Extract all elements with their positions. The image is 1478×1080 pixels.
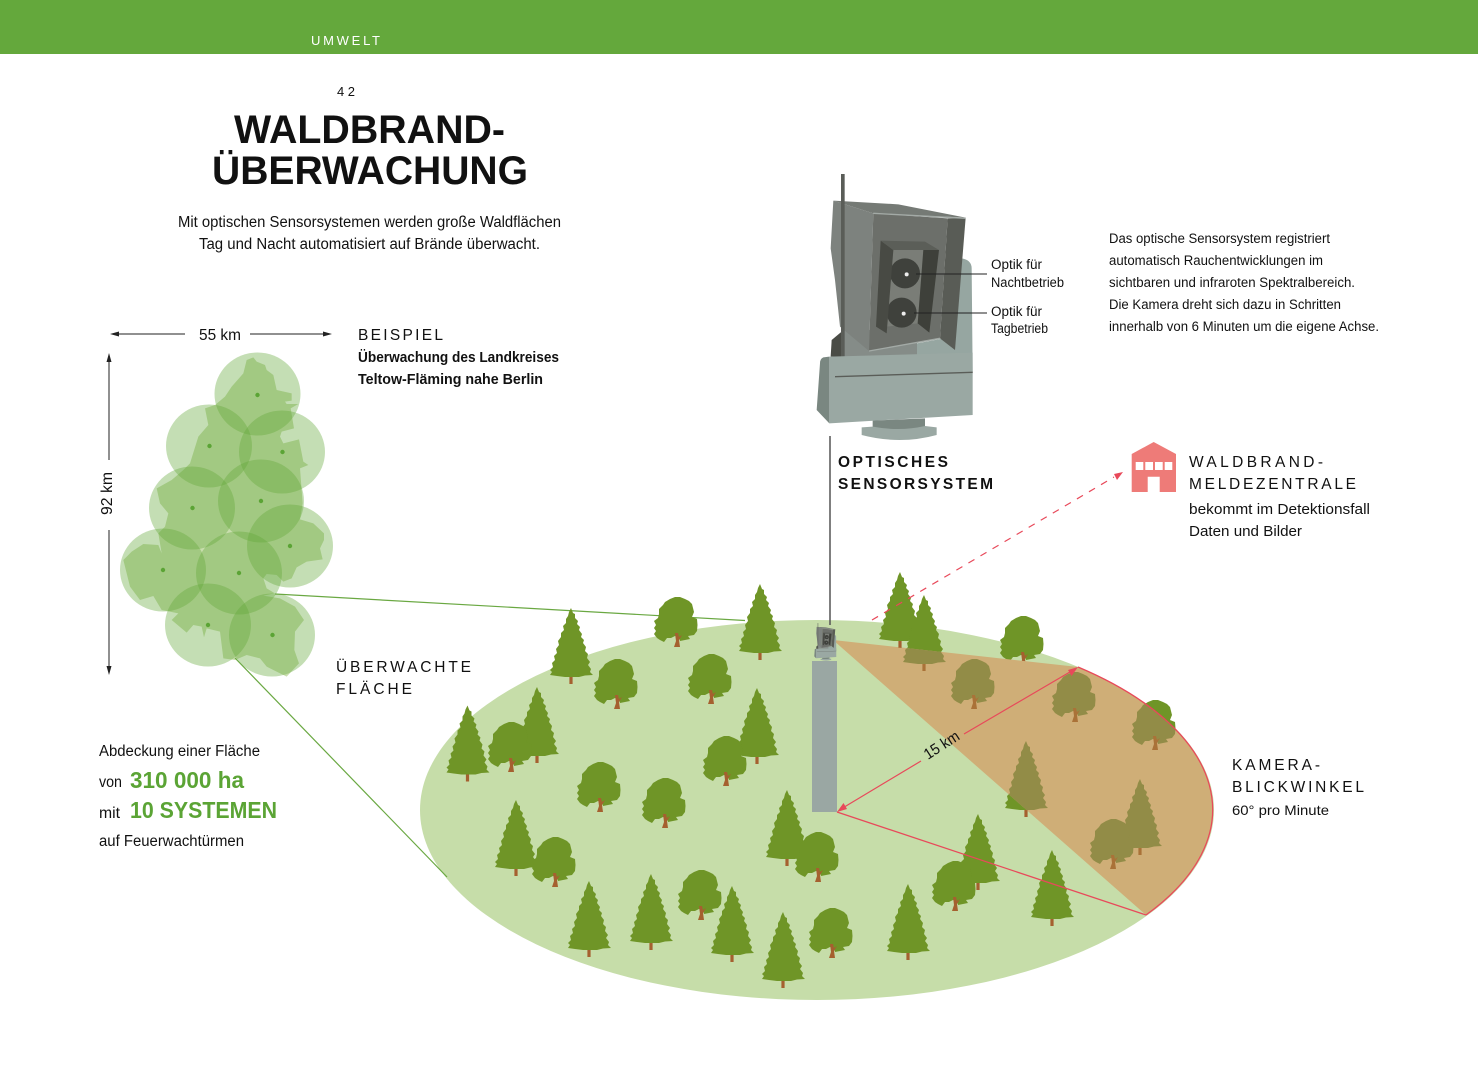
page number: 42: [337, 84, 355, 99]
header bar: UMWELT: [311, 33, 380, 48]
trees: [446, 572, 1176, 988]
sensor description: Das optische Sensorsystem registriert: [1109, 231, 1330, 246]
map dimensions: 55 km: [199, 327, 241, 344]
range arrow 15 km: [837, 667, 1078, 812]
connector lines from map to forest: [235, 594, 745, 877]
coverage statistics: mit: [99, 805, 121, 822]
optical sensor camera: [817, 174, 973, 440]
label: monitored area: FLÄCHE: [336, 681, 412, 698]
camera pointer line: [829, 436, 831, 625]
lens leader lines: [914, 274, 987, 313]
example text: Überwachung des Landkreises: [358, 349, 559, 366]
lens labels: Tagbetrieb: [991, 321, 1048, 336]
label: camera viewing angle: 60° pro Minute: [1232, 802, 1329, 818]
label: fire control centre: bekommt im Detektionsfall: [1189, 501, 1370, 518]
header bar: [0, 0, 1478, 54]
small camera on tower: [814, 623, 836, 661]
sensor description: Die Kamera dreht sich dazu in Schritten: [1109, 297, 1341, 312]
label: monitored area: ÜBERWACHTE: [336, 658, 471, 676]
intro text: Mit optischen Sensorsystemen werden große Waldflächen: [178, 214, 561, 231]
example text: Teltow-Fläming nahe Berlin: [358, 371, 543, 388]
example text: [358, 327, 559, 388]
coverage statistics: [99, 743, 277, 850]
example text: BEISPIEL: [358, 327, 443, 344]
label: fire control centre: Daten und Bilder: [1189, 523, 1302, 540]
map: Landkreis region with sensor coverage circles: [120, 352, 333, 677]
intro text: [178, 214, 561, 253]
lens labels: Optik für: [991, 304, 1043, 319]
title: [212, 108, 528, 193]
trees tinted inside the wedge: [898, 647, 1176, 869]
label: fire control centre: [1189, 454, 1370, 540]
sensor description: innerhalb von 6 Minuten um die eigene Achse.: [1109, 319, 1379, 334]
sensor description: [1109, 231, 1379, 334]
forest ellipse: [420, 620, 1214, 1000]
coverage statistics: 310 000 ha: [130, 767, 244, 793]
title: ÜBERWACHUNG: [212, 148, 528, 193]
coverage statistics: auf Feuerwachtürmen: [99, 833, 244, 850]
range arrow 15 km: 15 km: [921, 728, 963, 763]
sensor description: automatisch Rauchentwicklungen im: [1109, 253, 1323, 268]
label: camera viewing angle: KAMERA-: [1232, 757, 1320, 774]
label: monitored area: [336, 658, 471, 698]
label: optical sensor system: OPTISCHES: [838, 454, 948, 471]
dashed arrow to fire control centre: [872, 472, 1123, 620]
viewing angle outline: [837, 667, 1213, 915]
label: fire control centre: WALDBRAND-: [1189, 454, 1323, 471]
title: WALDBRAND-: [234, 108, 505, 152]
tower: [812, 661, 837, 812]
lens labels: [991, 257, 1064, 336]
camera view wedge: [833, 640, 1213, 915]
label: camera viewing angle: [1232, 757, 1364, 818]
label: fire control centre: MELDEZENTRALE: [1189, 476, 1356, 493]
coverage statistics: Abdeckung einer Fläche: [99, 743, 260, 760]
coverage statistics: 10 SYSTEMEN: [130, 797, 277, 823]
label: camera viewing angle: BLICKWINKEL: [1232, 779, 1364, 796]
sensor description: sichtbaren und infraroten Spektralbereich.: [1109, 275, 1355, 290]
map dimensions: 92 km: [99, 472, 116, 515]
map dimensions: [99, 327, 332, 675]
icon: fire control centre building: [1132, 442, 1176, 492]
lens labels: Nachtbetrieb: [991, 275, 1064, 290]
intro text: Tag und Nacht automatisiert auf Brände überwacht.: [199, 236, 540, 253]
label: optical sensor system: SENSORSYSTEM: [838, 476, 993, 493]
coverage statistics: von: [99, 774, 122, 791]
label: optical sensor system: [838, 454, 993, 493]
lens labels: Optik für: [991, 257, 1043, 272]
